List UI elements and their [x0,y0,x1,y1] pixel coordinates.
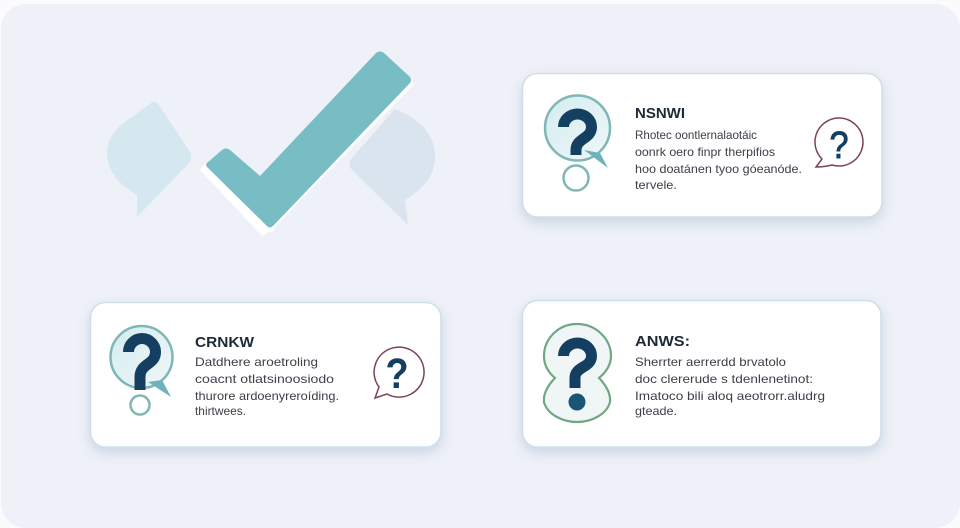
icon: figure-eight question mark [544,324,611,422]
icon: small question bubble: ? [829,123,849,166]
icon: left faded speech bubble [107,102,191,217]
icon: large question bubble [545,96,610,190]
panel: top right card [522,74,882,217]
heading: NSNWI [635,105,685,122]
panel: bottom right card [522,300,881,447]
icon: right faded speech bubble [350,109,435,225]
icon: small question bubble: ? [385,349,409,398]
text block [195,355,339,418]
text block: tervele. [635,178,677,192]
heading: CRNKW [195,334,255,351]
text block: Imatoco bili aloq aeotrorr.aludrg [635,389,825,403]
text block: hoo doatánen tyoo góeanóde. [635,162,802,176]
text block: doc clererude s tdenlenetinot: [635,372,813,386]
text block: oonrk oero finpr therpifios [635,145,775,159]
text block: Sherrter aerrerdd brvatolo [635,355,786,369]
text block: gteade. [635,404,677,418]
panel: bottom left card [90,302,441,447]
icon: large question bubble [110,326,172,414]
text block [635,355,825,418]
icon: small question bubble [374,347,424,398]
heading: ANWS: [635,333,690,350]
icon: small question bubble [815,118,863,167]
text block: thurore ardoenyreroíding. [195,389,339,403]
text block [635,128,802,192]
text block: coacnt otlatsinoosiodo [195,372,334,386]
icon: large check mark [200,52,414,236]
text block: thirtwees. [195,404,246,418]
text block: Rhotec oontlernalaotáic [635,128,757,142]
text block: Datdhere aroetroling [195,355,318,369]
